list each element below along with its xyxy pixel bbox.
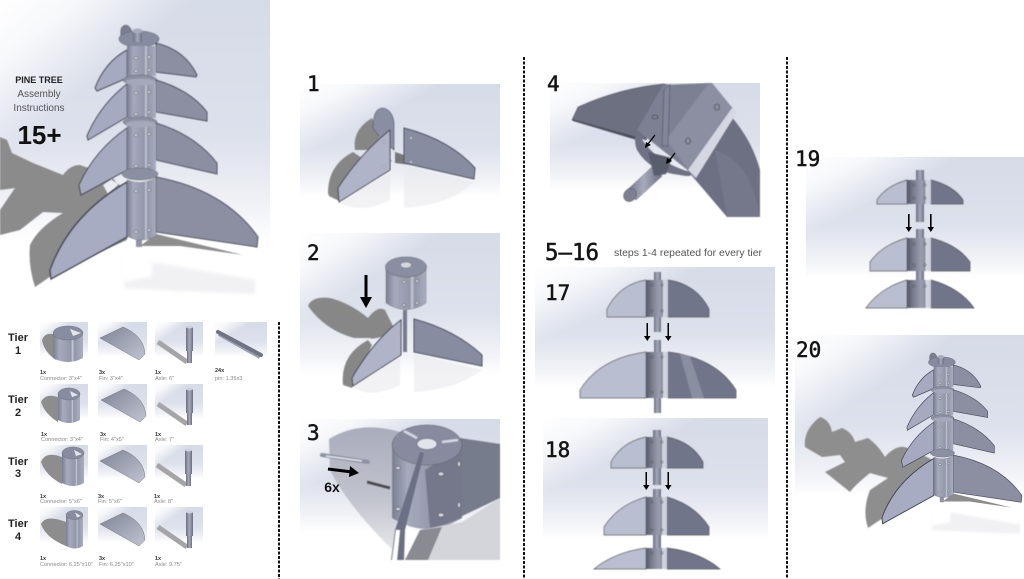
steps 5-16 heading [545,240,763,266]
finished tree model [50,25,258,294]
arrow: down [360,275,372,308]
tier 3 parts: Fin: 5"x6" [98,499,122,505]
tree shadow [0,137,127,287]
arrows: down [643,472,672,490]
step 4 [547,72,760,217]
tier 4 parts: Axle: 9.75" [155,562,182,568]
step 20 [795,335,1024,538]
step 18 [543,418,768,569]
tier 3 parts: 3 [15,468,21,480]
steps 5-16 heading: steps 1-4 repeated for every tier [614,248,763,259]
tier 1 parts: 24x [215,368,225,374]
tier 4 parts: Connector: 6.25"x10" [40,562,93,568]
steps 5-16 heading: 5–16 [545,240,599,266]
step 4 detail view [572,83,760,217]
tier 1 parts: 1x [155,370,162,376]
tier 1 parts: Axle: 6" [155,376,174,382]
step 20 number: 20 [796,338,821,362]
tier 2 parts [8,384,203,443]
title: 15+ [17,120,62,150]
tier 2 parts: 3x [100,432,107,438]
step 19 tiers [866,170,974,308]
tier 3 parts: Connector: 5"x6" [40,499,82,505]
arrows: down [906,214,934,232]
step 2 [300,233,500,410]
step 17 number: 17 [545,281,570,305]
tier 1 parts: 1 [15,345,21,357]
tier 1 parts: Fin: 3"x4" [99,376,123,382]
tier 2 parts: Fin: 4"x5" [100,437,124,443]
tier 1 parts: 3x [99,370,106,376]
step 17 tiers [580,272,736,413]
label: 6x: 6x [324,479,340,495]
step 3 number: 3 [307,421,320,445]
title [13,75,65,150]
step 1 [300,72,500,225]
title: Assembly [17,89,61,100]
tier 3 parts: 1x [154,494,161,500]
tier 2 parts: 2 [15,407,21,419]
step 20 finished tree [882,353,1022,534]
tier 3 parts: 3x [98,494,105,500]
tier 1 parts: Tier [8,332,29,344]
step 18 tiers [594,430,720,569]
tier 1 parts [8,322,267,382]
step 1 number: 1 [307,72,320,96]
tier 3 parts: 1x [40,494,47,500]
tier 2 parts: Axle: 7" [155,437,174,443]
tier 2 parts: 1x [41,432,48,438]
step 2 number: 2 [307,241,320,265]
step 19 number: 19 [795,147,820,171]
step 3 [300,419,500,560]
step 18 number: 18 [545,438,570,462]
panel: finished tree hero [0,0,270,303]
tier 3 parts: Tier [8,456,29,468]
step 2 fins and connector [308,257,482,393]
step 4 number: 4 [547,72,560,96]
step 20 shadow [805,417,933,528]
tier 2 parts: 1x [155,432,162,438]
step 19 [806,157,1024,308]
tier 4 parts: 3x [99,556,106,562]
arrows: down [644,323,672,341]
step 1 fins [328,108,475,208]
arrows: pin alignment [645,135,675,164]
tier 2 parts: Connector: 3"x4" [41,437,83,443]
title: Instructions [13,103,65,114]
tier 4 parts: 1x [155,556,162,562]
title: PINE TREE [15,75,63,85]
tier 4 parts: Fin: 6.25"x10" [99,562,134,568]
step 3 detail view [322,425,500,560]
tier 1 parts: pin: 1.35x3 [215,376,242,382]
tier 4 parts: Tier [8,518,29,530]
tier 4 parts: 4 [15,531,22,543]
panel: parts list [8,322,267,568]
tier 2 parts: Tier [8,394,29,406]
tier 4 parts: 1x [40,556,47,562]
tier 3 parts [8,445,203,505]
tier 1 parts: 1x [40,370,47,376]
step 17 [535,267,775,417]
tier 3 parts: Axle: 8" [154,499,173,505]
arrow: insert pins [328,466,359,477]
tier 4 parts [8,507,203,568]
tier 1 parts: Connector: 3"x4" [40,376,82,382]
